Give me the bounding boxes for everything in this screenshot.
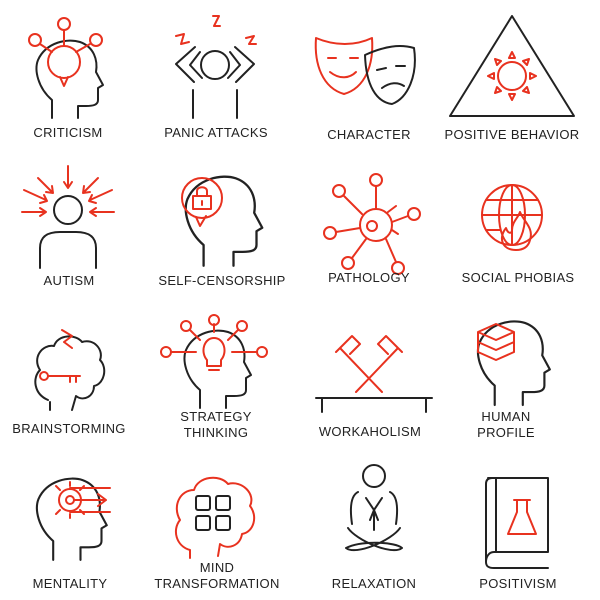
text: TRANSFORMATION	[154, 576, 280, 591]
icon: brainstorming	[35, 330, 104, 410]
icon: positivism book	[486, 478, 548, 568]
icon: positive behavior	[450, 16, 574, 116]
icon: human profile	[478, 321, 550, 405]
icon: criticism	[29, 18, 103, 118]
icon: social phobias	[482, 185, 542, 250]
text: PROFILE	[477, 425, 535, 440]
label: mind transformation: MIND	[200, 560, 234, 575]
label: pathology: PATHOLOGY	[328, 270, 410, 285]
label: autism: AUTISM	[44, 273, 94, 288]
icon: relaxation	[346, 465, 402, 550]
icon: strategy thinking	[161, 315, 267, 408]
icon: mentality	[37, 479, 110, 560]
icon: panic attacks	[176, 16, 256, 118]
label: self-censorship: SELF-CENSORSHIP	[158, 273, 286, 288]
label: brainstorming: BRAINSTORMING	[12, 421, 126, 436]
icon: character masks	[316, 38, 415, 104]
icon: mind transformation	[176, 478, 254, 558]
label: criticism: CRITICISM	[33, 125, 103, 140]
label: character: CHARACTER	[327, 127, 411, 142]
icon: pathology	[324, 174, 420, 274]
label: positivism: POSITIVISM	[479, 576, 557, 591]
text: THINKING	[184, 425, 248, 440]
label: positive behavior: POSITIVE BEHAVIOR	[445, 127, 579, 142]
label: human profile: HUMAN	[481, 409, 531, 424]
label: workaholism: WORKAHOLISM	[319, 424, 421, 439]
icon: autism	[22, 166, 114, 268]
label: panic attacks: PANIC ATTACKS	[164, 125, 268, 140]
label: social phobias: SOCIAL PHOBIAS	[462, 270, 574, 285]
icon: workaholism	[316, 336, 432, 412]
label: relaxation: RELAXATION	[332, 576, 416, 591]
label: mentality: MENTALITY	[33, 576, 107, 591]
label: strategy thinking: STRATEGY	[180, 409, 252, 424]
icon: self-censorship	[182, 177, 262, 266]
